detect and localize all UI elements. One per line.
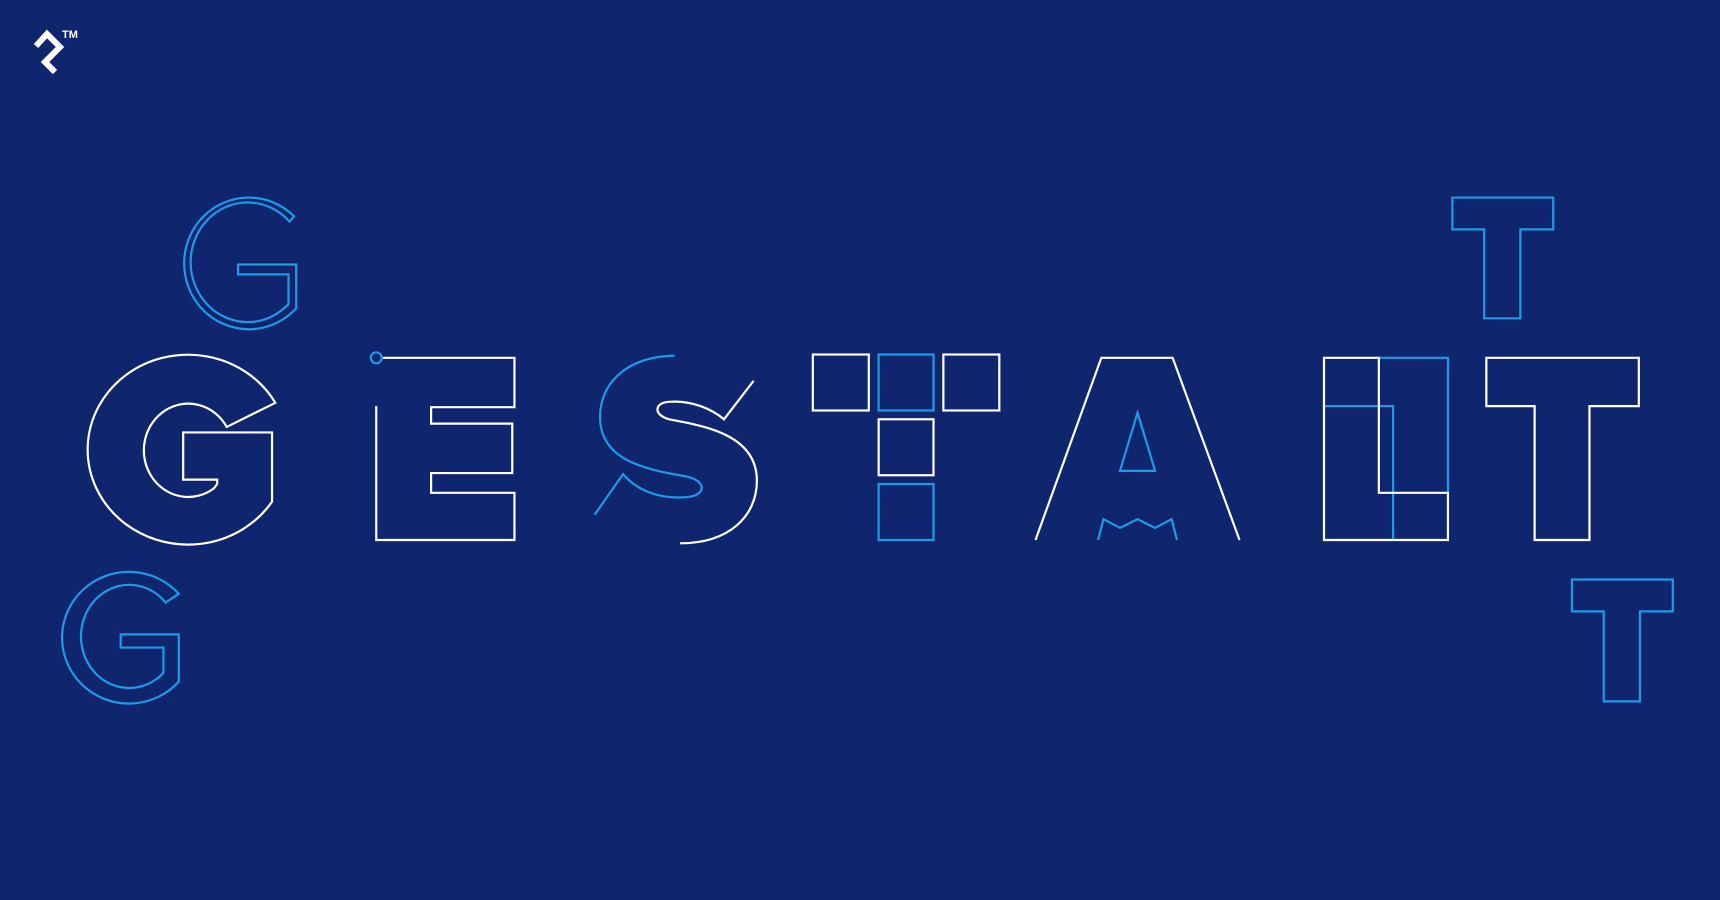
- logo: [34, 29, 78, 74]
- dot: blue circle: [371, 352, 382, 363]
- letter: S: [595, 356, 757, 543]
- letter: big white G: [88, 355, 275, 545]
- letter: white T: [1486, 358, 1639, 540]
- letter: top blue T: [1452, 198, 1553, 318]
- letter: bottom blue G: [62, 572, 179, 704]
- letter: bottom blue T: [1572, 580, 1673, 701]
- trademark: TM: [62, 29, 78, 41]
- letter: A: [1036, 358, 1240, 540]
- letter: top blue G: [184, 198, 296, 329]
- letter: E: [371, 352, 514, 540]
- letter: T from squares: [813, 355, 999, 540]
- letter: L: [1324, 358, 1448, 540]
